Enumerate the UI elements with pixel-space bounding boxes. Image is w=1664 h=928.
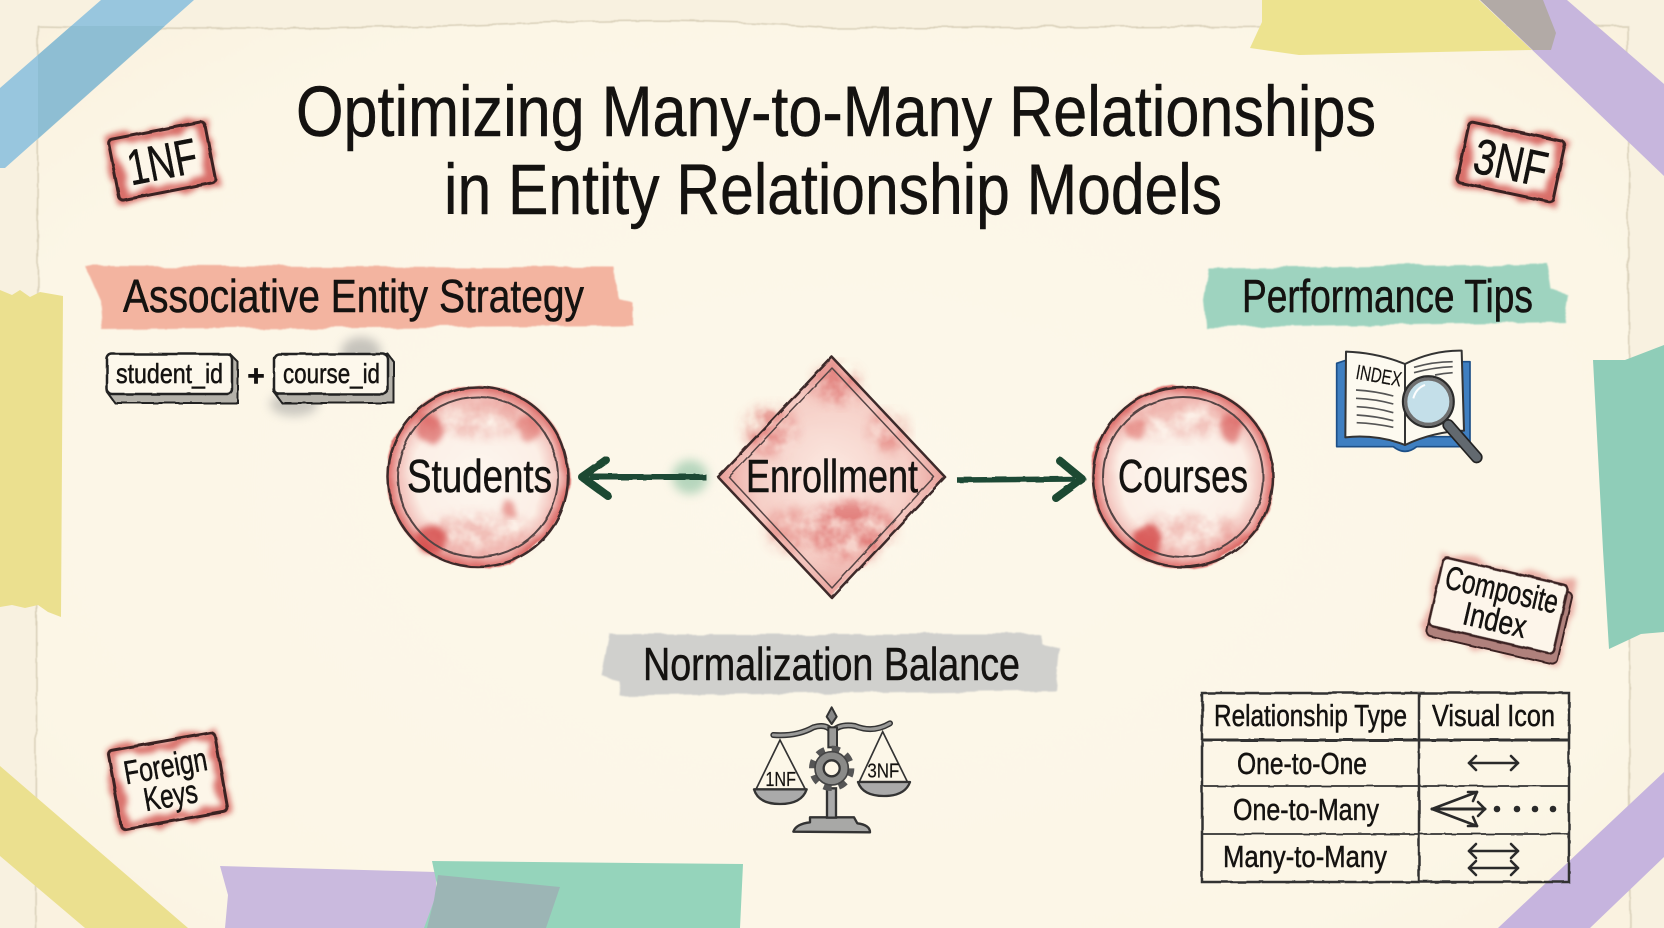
tape: yellow bottom left [0, 766, 188, 928]
title: in Entity Relationship Models [444, 151, 1222, 230]
entity: Students: Students [407, 450, 552, 502]
heading: Performance Tips [1203, 264, 1569, 328]
table: relationship types [1202, 693, 1569, 882]
stamp: Foreign Keys [108, 732, 228, 830]
arrow: Enrollment to Students [582, 460, 708, 496]
stamp: Foreign Keys: Keys [141, 772, 200, 818]
heading: Performance Tips: Performance Tips [1242, 270, 1533, 322]
table: relationship types: Relationship Type [1214, 698, 1407, 733]
table: relationship types: One-to-Many [1233, 792, 1379, 827]
stamp: Composite Index: Composite [1442, 559, 1562, 620]
icon: balance scale with gear: 1NF [765, 769, 796, 791]
entity: Courses [1092, 386, 1274, 568]
tape: purple bottom [220, 866, 436, 928]
entity: Courses: Courses [1118, 450, 1248, 502]
stamp: 1NF: 1NF [122, 128, 202, 196]
tape: teal right [1593, 345, 1664, 649]
table: relationship types: One-to-One [1237, 746, 1367, 781]
stamp: Foreign Keys: Foreign [121, 740, 210, 791]
tape: yellow top right [1250, 0, 1532, 55]
icon: balance scale with gear: 3NF [867, 760, 899, 782]
key: student_id + course_id: course_id [283, 358, 380, 389]
icon: one-to-one arrow [1469, 756, 1518, 770]
stamp: 3NF: 3NF [1469, 128, 1553, 198]
entity: Enrollment: Enrollment [746, 450, 918, 502]
tape: teal bottom [424, 861, 743, 928]
icon: index book with magnifier: INDEX [1354, 361, 1404, 392]
entity: Enrollment [718, 357, 945, 598]
stamp: Composite Index: Index [1460, 594, 1531, 645]
key: student_id + course_id: + [247, 360, 265, 393]
icon: one-to-many arrow [1432, 792, 1555, 826]
arrow: Enrollment to Courses [957, 461, 1082, 498]
stamp: Composite Index [1426, 557, 1574, 665]
tape: purple top right [1480, 0, 1664, 176]
tape: purple bottom right [1498, 772, 1664, 928]
entity: Students [387, 386, 569, 568]
title: Optimizing Many-to-Many Relationships [296, 73, 1376, 152]
icon: index book with magnifier [1337, 351, 1477, 457]
table: relationship types: Visual Icon [1432, 698, 1555, 733]
tape: yellow left [0, 290, 63, 617]
heading: Associative Entity Strategy: Associative Entity Strategy [123, 270, 584, 322]
title [296, 73, 1376, 230]
tape: blue top left [0, 0, 194, 168]
key: student_id + course_id [107, 337, 394, 416]
table: relationship types: Many-to-Many [1223, 839, 1387, 874]
heading: Normalization Balance: Normalization Balance [643, 638, 1020, 690]
icon: balance scale with gear [754, 707, 910, 832]
key: student_id + course_id: student_id [116, 358, 223, 389]
icon: many-to-many arrows [1469, 844, 1518, 875]
